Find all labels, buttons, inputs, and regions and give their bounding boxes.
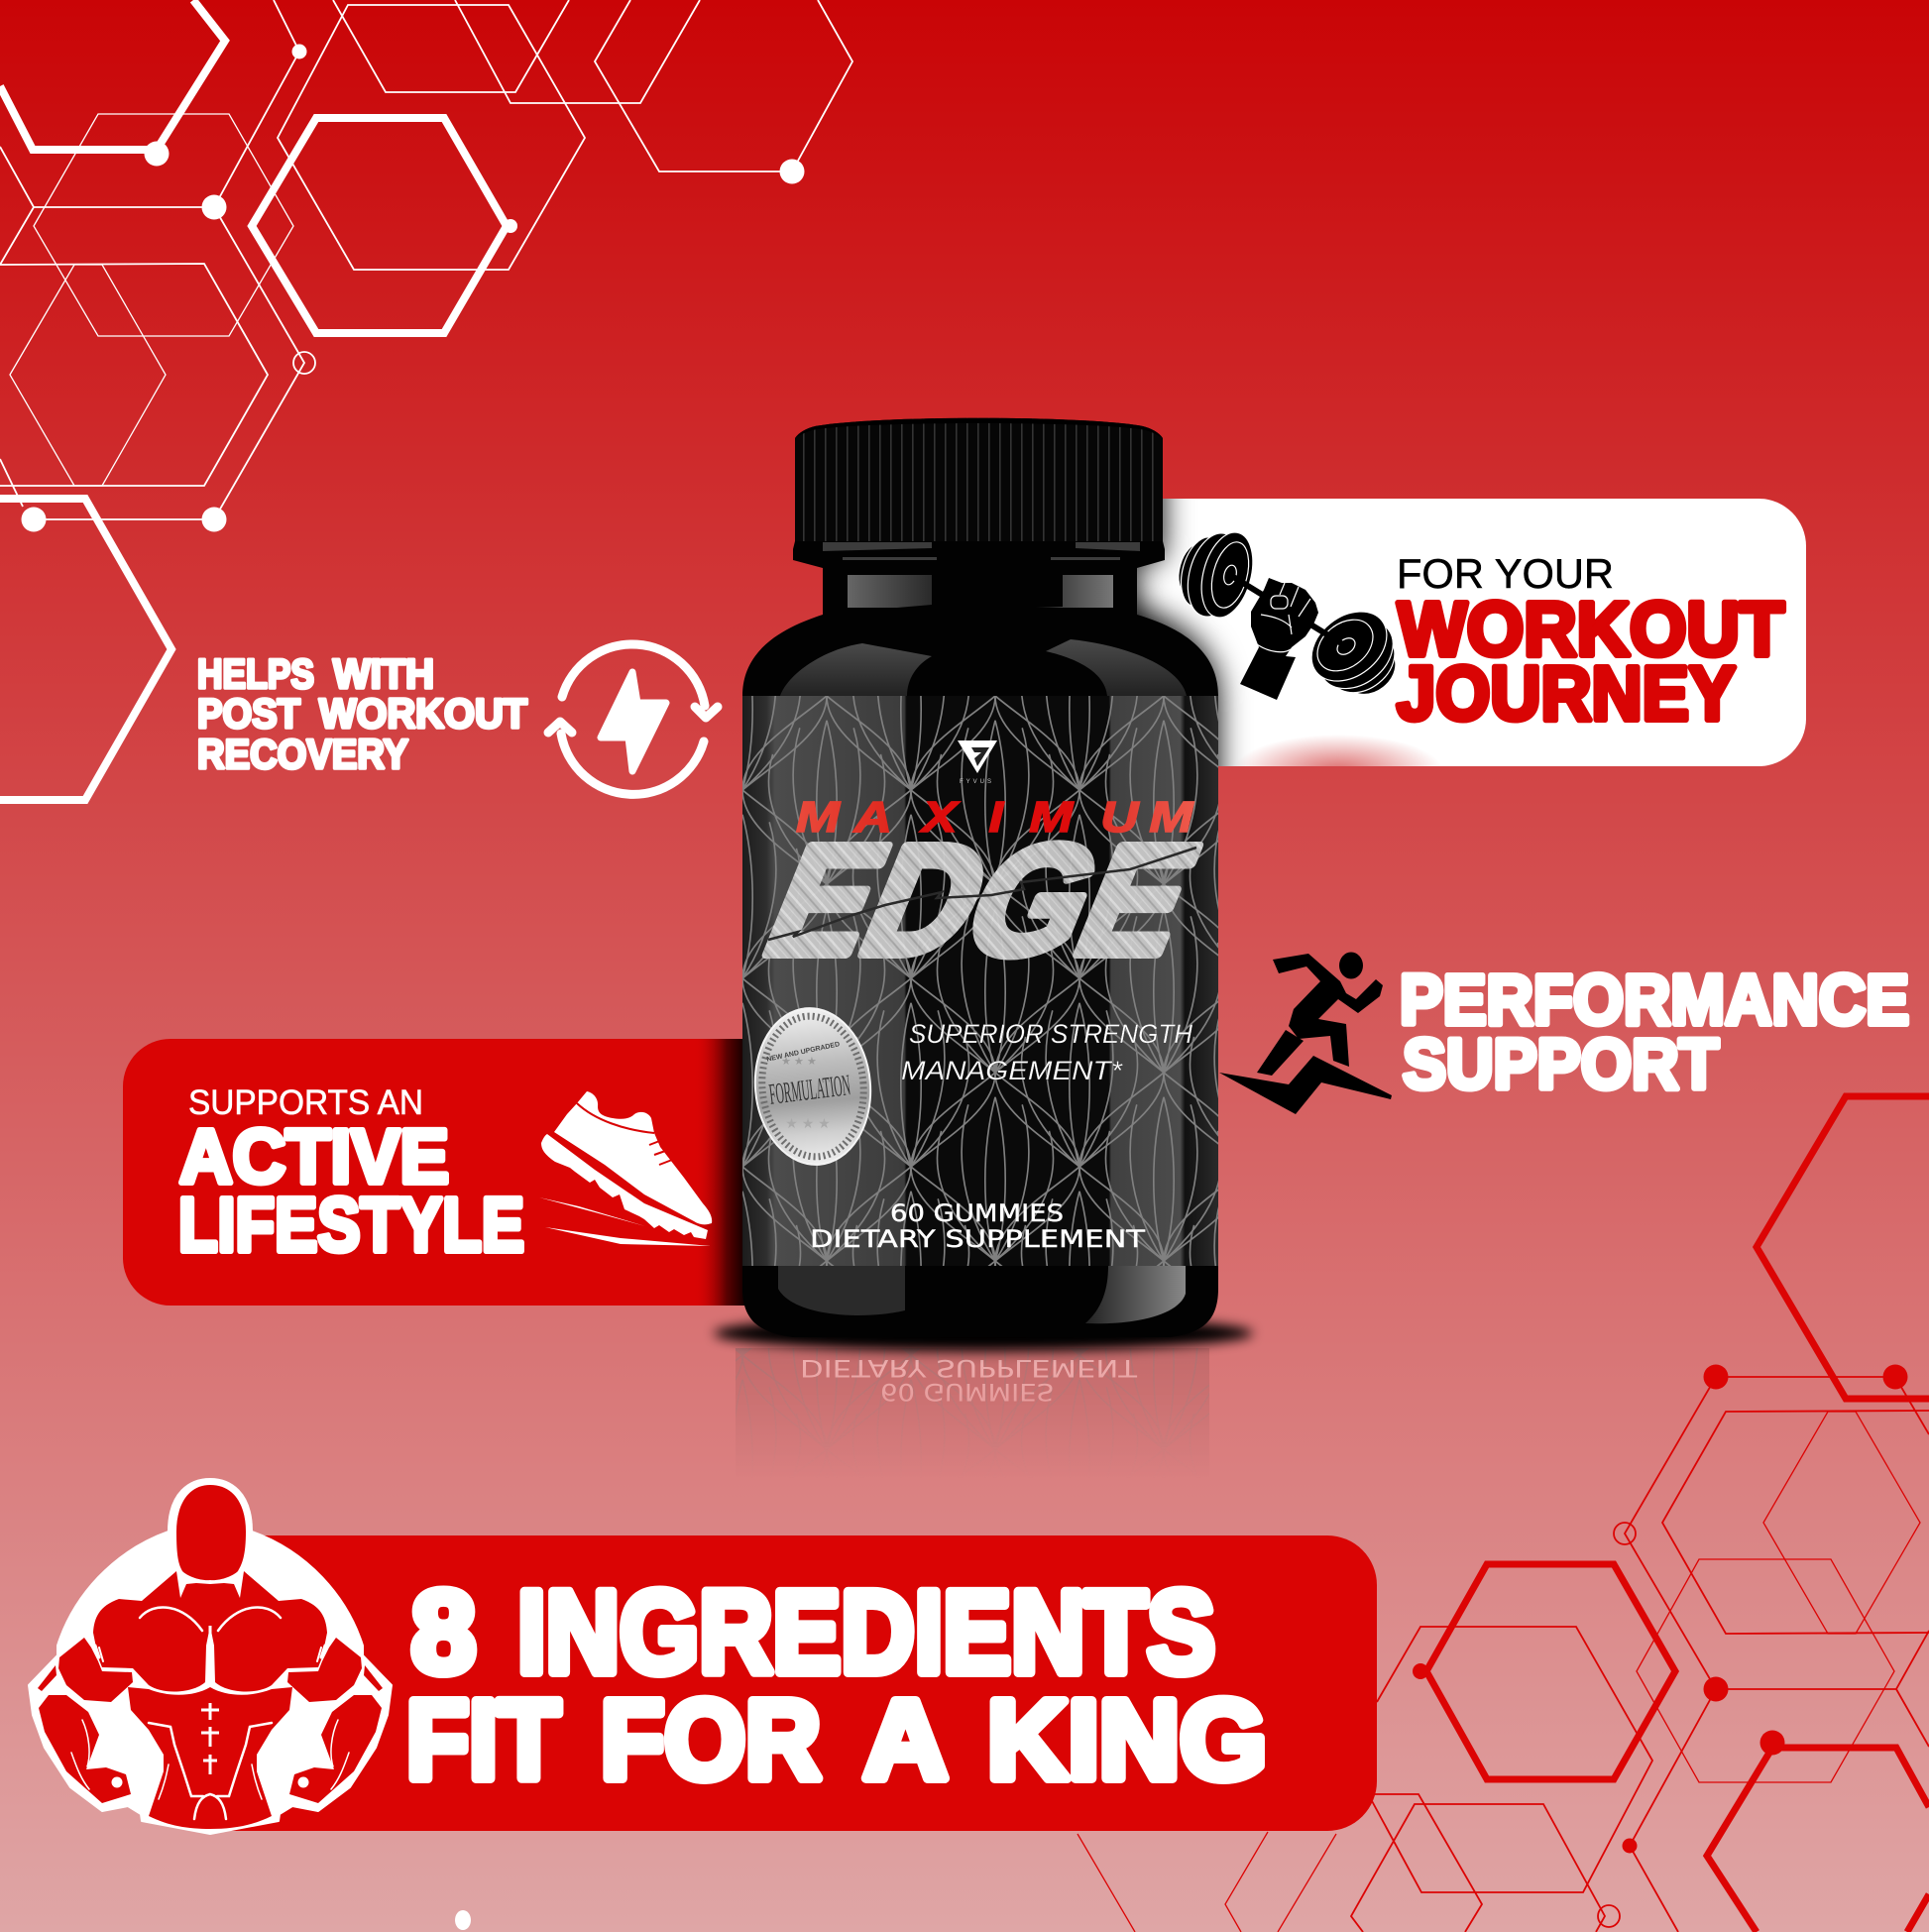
text: workout: WORKOUT bbox=[1398, 587, 1784, 672]
text: recovery lines: POST bbox=[197, 690, 300, 737]
icon: runner bbox=[1219, 952, 1392, 1114]
label count: 60 GUMMIES bbox=[890, 1199, 1064, 1227]
label title: edge: EDGE bbox=[743, 813, 1220, 987]
label seal: formulation: ★ ★ ★ bbox=[781, 1056, 817, 1068]
bottle reflection: 60 GUMMIES bbox=[880, 1378, 1054, 1406]
bottle reflection: DIETARY SUPPLEMENT bbox=[800, 1354, 1137, 1382]
bottle label bbox=[742, 696, 1218, 1266]
callout: for your workout journey bbox=[1137, 499, 1806, 766]
icon: barbell in fist bbox=[1174, 526, 1407, 705]
small white dot bbox=[455, 1910, 471, 1930]
text: recovery lines: WORKOUT bbox=[319, 690, 527, 737]
callout: helps with post workout recovery bbox=[197, 644, 718, 794]
hexagon network top left bbox=[0, 0, 852, 800]
label seal: formulation: FORMULATION bbox=[767, 1069, 852, 1111]
text: fit for a king: KING bbox=[987, 1677, 1267, 1802]
text: recovery lines: HELPS bbox=[197, 650, 314, 697]
label seal: formulation: NEW AND UPGRADED bbox=[766, 1041, 841, 1064]
label claim bbox=[901, 1019, 1192, 1085]
text: for your: FOR YOUR bbox=[1397, 550, 1614, 597]
bottle cap bbox=[795, 418, 1163, 543]
text: recovery lines: WITH bbox=[333, 650, 434, 697]
text: fit for a king: FIT bbox=[406, 1677, 560, 1802]
label count: DIETARY SUPPLEMENT bbox=[810, 1225, 1145, 1253]
icon: muscular torso bbox=[29, 1479, 392, 1834]
shoulder highlights bbox=[780, 643, 932, 696]
icon: running shoe bbox=[539, 1091, 712, 1246]
label seal: formulation bbox=[748, 1003, 877, 1170]
icon: energy recovery cycle bbox=[548, 644, 718, 794]
product bottle bbox=[742, 418, 1220, 1337]
callout: performance support bbox=[1219, 952, 1909, 1114]
bottle ground shadow bbox=[714, 1315, 1253, 1351]
text: journey: JOURNEY bbox=[1397, 651, 1736, 737]
label seal: formulation: ★ ★ ★ bbox=[785, 1115, 831, 1131]
hexagon network bottom right bbox=[1078, 1096, 1929, 1932]
bottom highlights bbox=[778, 1266, 905, 1315]
text: 8 ingredients: 8 bbox=[411, 1567, 476, 1698]
label title: maximum: MAXIMUM bbox=[796, 793, 1194, 842]
label logo: FYVUS bbox=[960, 779, 994, 785]
label claim: SUPERIOR STRENGTH bbox=[909, 1019, 1192, 1049]
text: fit for a king: A bbox=[863, 1677, 948, 1802]
label count bbox=[810, 1199, 1145, 1253]
label claim: MANAGEMENT* bbox=[901, 1056, 1124, 1085]
text: active: ACTIVE bbox=[179, 1114, 449, 1199]
bottle body bbox=[742, 565, 1218, 1337]
neck highlights bbox=[848, 565, 932, 608]
bottle reflection bbox=[736, 1348, 1209, 1455]
text: recovery lines: RECOVERY bbox=[197, 731, 408, 777]
banner: 8 ingredients bbox=[198, 1535, 1377, 1831]
text: fit for a king: FOR bbox=[601, 1677, 821, 1802]
text: supports an: SUPPORTS AN bbox=[188, 1083, 423, 1122]
callout: supports an active lifestyle bbox=[123, 1039, 753, 1306]
text: support: SUPPORT bbox=[1403, 1026, 1719, 1104]
text: 8 ingredients: INGREDIENTS bbox=[517, 1567, 1215, 1698]
text: recovery lines bbox=[197, 650, 527, 777]
text: lifestyle: LIFESTYLE bbox=[178, 1183, 524, 1268]
text: fit for a king bbox=[406, 1677, 1267, 1802]
label logo bbox=[958, 740, 997, 785]
